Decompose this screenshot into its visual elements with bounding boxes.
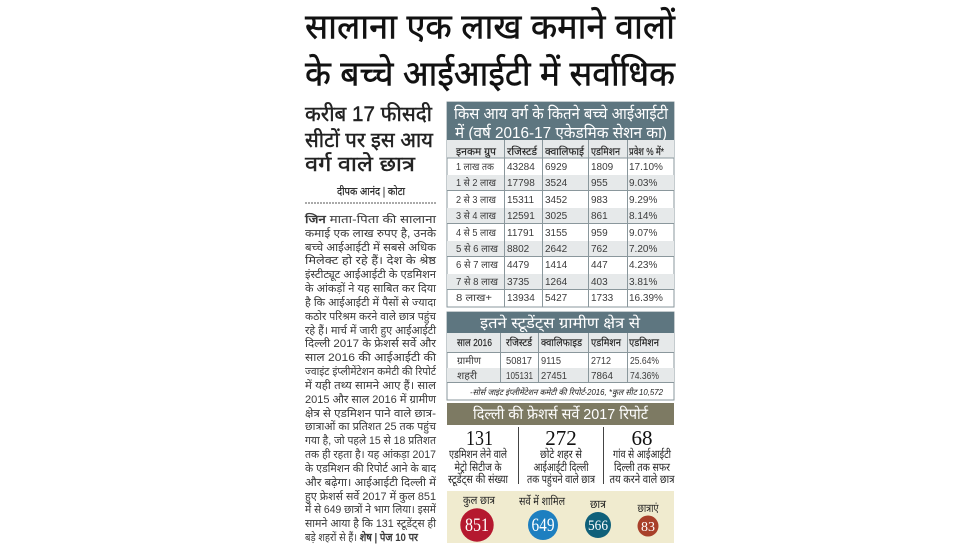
table data rows: 6 से 7 लाख (456, 259, 499, 271)
table row shading (447, 175, 674, 289)
stat: 131 metro students: एडमिशन लेने वाले (449, 447, 507, 461)
table data rows: 1 लाख तक (456, 162, 494, 173)
circle: in survey 649: 649 (532, 515, 554, 536)
table data rows: 17798 (507, 178, 535, 189)
article body text: कमाई एक लाख रुपए है, उनके (305, 227, 437, 240)
main headline (305, 6, 676, 94)
table data rows: 861 (591, 211, 608, 222)
circle: female students 83: 83 (641, 520, 655, 535)
table data rows: 8.14% (629, 211, 657, 222)
stat: 68 village students: दिल्ली तक सफर (614, 460, 670, 474)
circle: in survey 649 (519, 494, 565, 540)
article body text: साल 2016 की आईआईटी की (305, 351, 436, 364)
article body text: के एडमिशन की रिपोर्ट आने के बाद (305, 462, 436, 475)
rural table header: एडमिशन (629, 336, 659, 349)
table header row: इनकम ग्रुप (456, 146, 497, 158)
article body text: ज्वाइंट इंप्लीमेंटेशन कमेटी की रिपोर्ट (305, 365, 437, 378)
article body text: जिन माता-पिता की सालाना (304, 212, 436, 226)
table data rows: 9.29% (629, 195, 657, 206)
table data rows: 8802 (507, 244, 530, 255)
table data rows: 7 से 8 लाख (456, 276, 499, 288)
rural table rows: 7864 (591, 371, 613, 382)
table header row: रजिस्टर्ड (507, 145, 538, 158)
panel: income group table (447, 102, 674, 307)
table data rows: 8 लाख+ (456, 293, 492, 304)
stat: 131 metro students: 131 (466, 426, 493, 450)
rural table rows: 27451 (541, 371, 567, 382)
table data rows: 43284 (507, 162, 535, 173)
table data rows: 955 (591, 178, 608, 189)
table data rows: 3735 (507, 277, 530, 288)
table data rows: 9.07% (629, 228, 657, 239)
table data rows: 17.10% (629, 162, 663, 173)
table data rows: 3524 (545, 178, 568, 189)
table data rows: 12591 (507, 211, 535, 222)
table data rows: 983 (591, 195, 608, 206)
table data rows: 3025 (545, 211, 568, 222)
sub headline: सीटों पर इस आय (305, 128, 434, 152)
table data rows: 4 से 5 लाख (456, 227, 497, 239)
circle: total students 851: कुल छात्र (463, 495, 496, 508)
table data rows: 3.81% (629, 277, 657, 288)
article body text: मिलेक्ट हो रहे हैं। देश के श्रेष्ठ (305, 254, 437, 267)
table header row: क्वालिफाई (545, 145, 585, 158)
circle: female students 83 (638, 502, 659, 536)
panel: survey totals (447, 491, 674, 543)
article body text: रहे हैं। मार्च में जारी हुए आईआईटी (305, 324, 436, 338)
table data rows: 5 से 6 लाख (456, 243, 499, 255)
rural table rows: 105131 (506, 371, 533, 382)
byline (305, 185, 436, 203)
article body text: और बढ़ेगा। आईआईटी दिल्ली में (305, 476, 436, 489)
source note: -सोर्स जाइंट इंप्लीमेंटेशन कमेटी की रिपोर्ट-2016, *कुल सीट 10,572 (470, 387, 663, 398)
rural table rows (457, 355, 659, 382)
rural table header: रजिस्टर्ड (506, 336, 533, 349)
stat: 68 village students: तय करने वाले छात्र (610, 472, 675, 486)
sub headline (305, 102, 434, 176)
article body text: गया है, जो पहले 15 से 18 प्रतिशत (305, 434, 437, 447)
article body text: बड़े शहरों से हैं। शेष | पेज 10 पर (305, 530, 418, 544)
article body text: तक ही रहता है। यह आंकड़ा 2017 (305, 448, 436, 461)
article body text: सामने आया है कि 131 स्टूडेंट्स ही (305, 517, 436, 531)
stat: 131 metro students: मेट्रो सिटीज के (454, 460, 502, 474)
table data rows: 1414 (545, 260, 568, 271)
table data rows: 7.20% (629, 244, 657, 255)
sub headline: करीब 17 फीसदी (305, 102, 433, 126)
article body text: क्षेत्र से एडमिशन पाने वाले छात्र- (305, 407, 436, 420)
table data rows: 1809 (591, 162, 614, 173)
circle: female students 83: छात्राएं (638, 502, 659, 515)
table header row: प्रवेश % में* (629, 145, 664, 158)
table data rows: 6929 (545, 162, 568, 173)
article body text: 2015 और साल 2016 में ग्रामीण (305, 393, 437, 406)
circle: total students 851 (460, 495, 496, 542)
table data rows: 959 (591, 228, 608, 239)
table title (447, 102, 674, 142)
sub headline: वर्ग वाले छात्र (305, 152, 415, 176)
table data rows: 16.39% (629, 293, 663, 304)
table title: में (वर्ष 2016-17 एकेडमिक सेशन का) (455, 123, 667, 142)
article body text: हुए फ्रेशर्स सर्वे 2017 में कुल 851 (305, 490, 436, 504)
rural table title (447, 312, 674, 333)
article body text: छात्राओं का प्रतिशत 25 तक पहुंच (305, 420, 437, 434)
table data rows: 4.23% (629, 260, 657, 271)
main headline: के बच्चे आईआईटी में सर्वाधिक (305, 54, 676, 94)
table header row (447, 140, 674, 158)
article body text: है कि आईआईटी में पैसों से ज्यादा (305, 296, 436, 309)
rural table rows: 2712 (591, 356, 611, 367)
circle: male students 566: 566 (588, 518, 608, 534)
table data rows: 1 से 2 लाख (456, 177, 497, 189)
rural table rows: शहरी (457, 370, 477, 382)
table header row: एडमिशन (591, 145, 620, 158)
panel: Delhi freshers survey heading (447, 403, 674, 425)
rural table title: इतने स्टूडेंट्स ग्रामीण क्षेत्र से (480, 314, 641, 333)
stat: 272 small town students: आईआईटी दिल्ली (534, 460, 589, 474)
circle: in survey 649: सर्वे में शामिल (519, 494, 565, 508)
stat: 272 small town students: 272 (545, 426, 577, 450)
table data rows: 762 (591, 244, 608, 255)
rural table rows: 9115 (541, 356, 561, 367)
article body text: बच्चे आईआईटी में सबसे अधिक (305, 241, 437, 254)
rural table header: साल 2016 (457, 337, 492, 349)
byline: दीपक आनंद | कोटा (337, 185, 405, 198)
article body text: के आंकड़ों ने यह साबित कर दिया (305, 282, 436, 295)
table data rows: 1264 (545, 277, 568, 288)
table data rows: 403 (591, 277, 608, 288)
table data rows: 447 (591, 260, 608, 271)
table data rows: 15311 (507, 195, 535, 206)
stat: 68 village students: 68 (632, 426, 652, 450)
main headline: सालाना एक लाख कमाने वालों (305, 6, 676, 46)
circle: male students 566: छात्र (590, 499, 607, 511)
article body text: में यही तथ्य सामने आए हैं। साल (305, 379, 437, 392)
rural table header (447, 333, 674, 352)
article body text: दिल्ली 2017 के फ्रेशर्स सर्वे और (305, 337, 437, 350)
rural table header: एडमिशन (591, 336, 621, 349)
table data rows: 2642 (545, 244, 568, 255)
table data rows: 3155 (545, 228, 568, 239)
article body text (304, 212, 437, 544)
rural table rows: 50817 (506, 356, 532, 367)
rural table rows: 74.36% (630, 371, 659, 382)
table data rows: 2 से 3 लाख (456, 194, 497, 206)
article body text: में से 649 छात्रों ने भाग लिया। इसमें (305, 503, 436, 516)
rural table rows: ग्रामीण (457, 355, 482, 367)
stat: 272 small town students (527, 426, 596, 487)
circle: total students 851: 851 (465, 515, 489, 536)
rural table header: क्वालिफाइड (541, 336, 582, 349)
table data rows: 13934 (507, 293, 535, 304)
rural table rows: 25.64% (630, 356, 659, 367)
stat: 272 small town students: तक पहुंचने वाले छात्र (527, 472, 596, 487)
article body text: कठोर परिश्रम करने वाले छात्र पहुंच (305, 310, 437, 324)
article body text: इंस्टीट्यूट आईआईटी के एडमिशन (305, 268, 437, 282)
table data rows: 5427 (545, 293, 568, 304)
table data rows: 1733 (591, 293, 614, 304)
stat: 68 village students: गांव से आईआईटी (613, 447, 672, 461)
table data rows: 3452 (545, 195, 568, 206)
table data rows (456, 162, 663, 304)
stat: 68 village students (610, 426, 675, 486)
stat: 272 small town students: छोटे शहर से (540, 447, 582, 461)
stat: 131 metro students: स्टूडेंट्स की संख्या (448, 472, 509, 487)
panel: rural and urban students table (447, 312, 674, 400)
circle: male students 566 (585, 499, 611, 538)
table data rows: 11791 (507, 228, 535, 239)
table title: किस आय वर्ग के कितने बच्चे आईआईटी (454, 104, 669, 123)
table data rows: 3 से 4 लाख (456, 210, 497, 222)
stat: 131 metro students (448, 426, 509, 487)
panel: Delhi freshers survey heading: दिल्ली की फ्रेशर्स सर्वे 2017 रिपोर्ट (473, 405, 649, 423)
table data rows: 4479 (507, 260, 530, 271)
table data rows: 9.03% (629, 178, 657, 189)
